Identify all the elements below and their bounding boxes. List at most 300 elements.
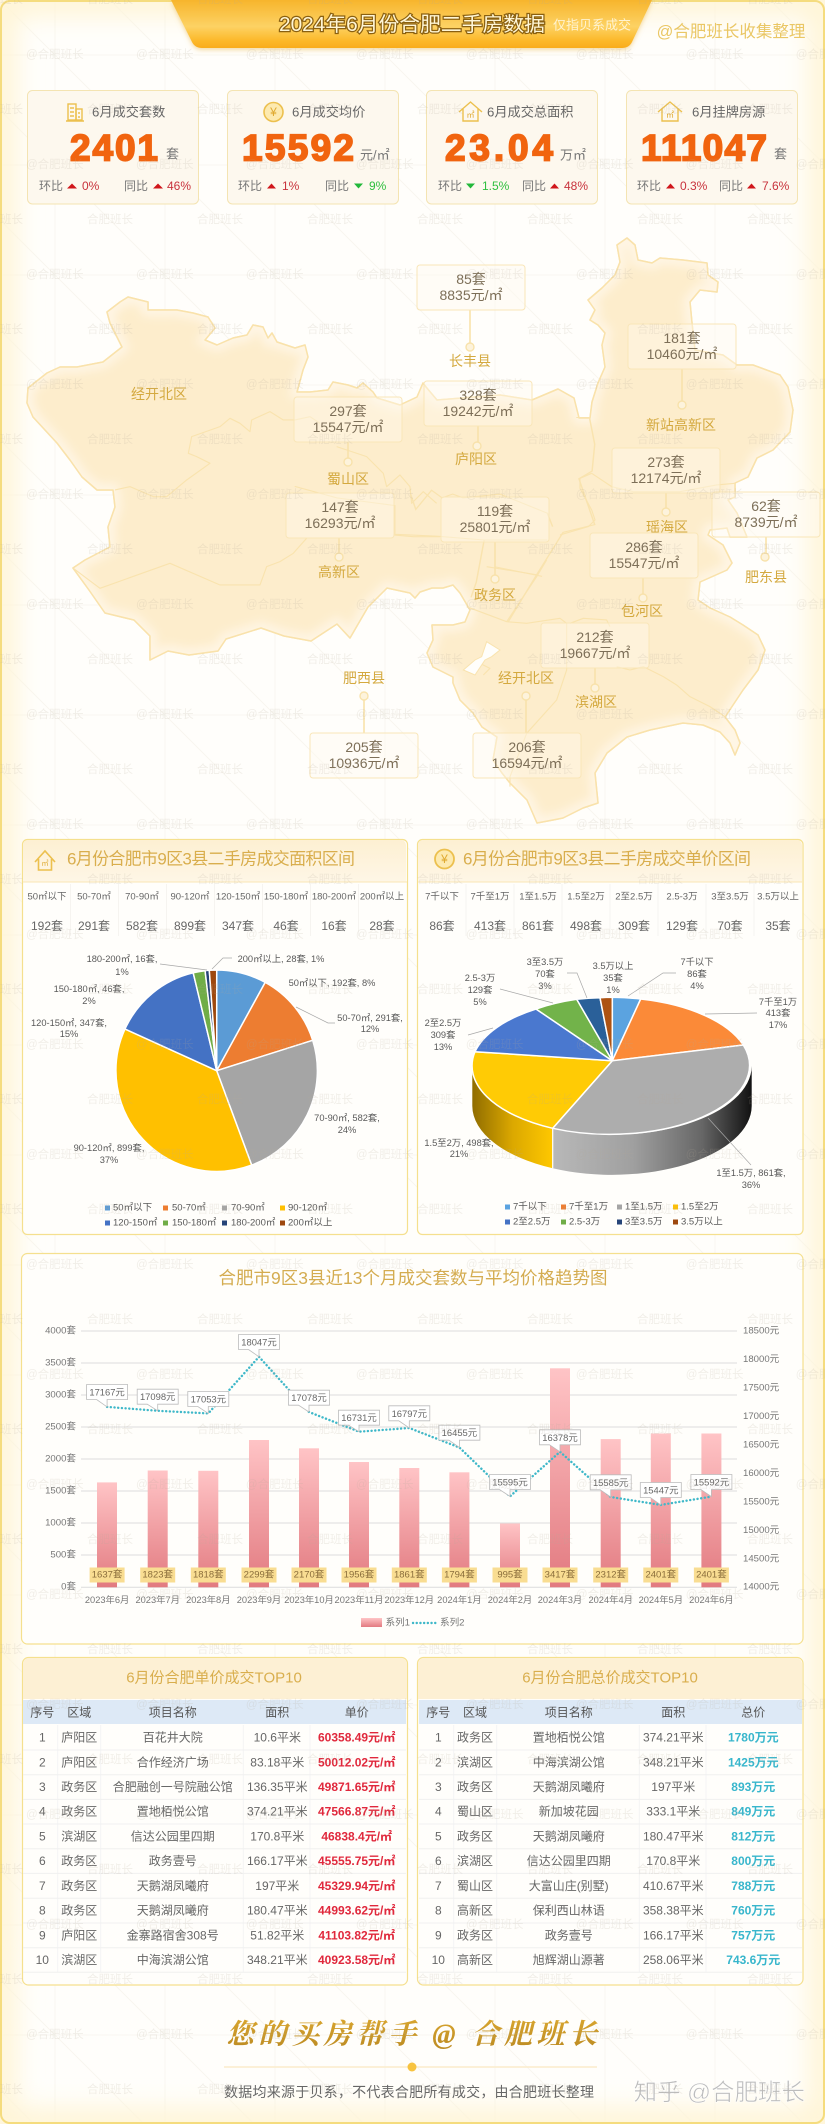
table rows: [23, 1725, 406, 1972]
legend: area: 50-70㎡: [172, 1202, 206, 1214]
table rows: 天鹅湖凤曦府: [137, 1903, 209, 1918]
pie labels: area: 90-120㎡, 899套,: [74, 1142, 144, 1153]
change row: [438, 179, 588, 193]
table rows: 258.06平米: [643, 1953, 704, 1967]
right axis: [743, 1326, 780, 1592]
legend: area: 90-120㎡: [288, 1202, 328, 1214]
change row: 7.6%: [762, 179, 790, 193]
KPI card: average price: 元/㎡: [360, 148, 390, 162]
table rows: 新加坡花园: [539, 1804, 599, 1819]
legend: area: 120-150㎡: [113, 1218, 158, 1228]
table rows: 7: [435, 1879, 442, 1893]
data label: 经开区: [473, 733, 581, 778]
change row: 0%: [82, 179, 100, 193]
bar value labels: 2299套: [244, 1568, 275, 1580]
table rows: 348.21平米: [247, 1953, 308, 1967]
table rows: 358.38平米: [643, 1904, 704, 1918]
price table: [425, 884, 799, 936]
icon: house listing: ㎡: [666, 110, 674, 120]
table rows: 庐阳区: [61, 1927, 97, 1942]
district borders: [73, 412, 735, 787]
pie labels: area: 200㎡以上, 28套, 1%: [238, 953, 324, 964]
month labels: 2024年4月: [588, 1594, 633, 1605]
bar value labels: 1818套: [193, 1568, 224, 1580]
district names: 滨湖区: [575, 694, 617, 710]
area table: [27, 884, 405, 936]
table rows: 置地栢悦公馆: [137, 1804, 209, 1819]
table rows: 348.21平米: [643, 1755, 704, 1769]
3D pie labels: [424, 957, 797, 1190]
KPI card: transactions: 6月成交套数: [92, 104, 165, 120]
price line: [107, 1357, 711, 1505]
heading: 6月份合肥单价成交TOP10: [126, 1668, 302, 1686]
data label: 经开区: 206套: [508, 739, 546, 755]
district names: 经开北区: [131, 386, 187, 402]
pie labels: area: 2%: [82, 996, 96, 1006]
data label: 肥西县: [310, 733, 418, 778]
table rows: 374.21平米: [247, 1805, 308, 1819]
price callouts: 15447元: [643, 1484, 679, 1496]
area table: 90-120㎡: [170, 892, 210, 902]
table rows: 10: [36, 1953, 49, 1967]
change row: 46%: [167, 179, 191, 193]
table rows: 政务区: [61, 1804, 97, 1819]
pie labels: area: 12%: [361, 1024, 379, 1034]
area table: 50㎡以下: [27, 892, 67, 902]
table header: 单价: [345, 1706, 369, 1720]
KPI card: transactions: [28, 90, 198, 204]
table rows: 政务壹号: [545, 1927, 593, 1942]
table rows: 893万元: [731, 1780, 775, 1794]
table rows: 166.17平米: [643, 1928, 704, 1942]
right axis: 18500元: [743, 1326, 780, 1336]
table rows: 812万元: [731, 1829, 775, 1843]
table rows: 51.82平米: [250, 1928, 304, 1942]
3D pie labels: 21%: [450, 1149, 468, 1159]
table rows: 788万元: [731, 1879, 775, 1893]
table header: 序号: [30, 1705, 54, 1720]
data label: 瑶海区: 273套: [647, 454, 685, 470]
data label: 肥东县: 8739元/㎡: [734, 514, 798, 530]
price table: 1.5至2万: [567, 892, 605, 902]
table rows: 金寨路宿舍308号: [127, 1927, 219, 1942]
KPI card: total area: 万㎡: [560, 148, 586, 162]
table header: 总价: [741, 1706, 765, 1720]
table rows: 849万元: [731, 1805, 775, 1819]
table rows: 41103.82元/㎡: [318, 1927, 395, 1942]
area table: 46套: [273, 919, 299, 933]
table header: 序号: [426, 1705, 450, 1720]
district names: 政务区: [474, 587, 516, 603]
data label: 经开区: 16594元/㎡: [492, 755, 562, 771]
table rows: 天鹅湖凤曦府: [137, 1878, 209, 1893]
panel: top 10 by unit price: [22, 1658, 408, 1985]
price table: 498套: [570, 919, 602, 933]
panel heading: ㎡: [42, 860, 48, 868]
price table: 3.5万以上: [757, 892, 799, 902]
table rows: 4: [435, 1805, 442, 1819]
data label: 新站高新区: 10460元/㎡: [647, 346, 717, 362]
price callouts: [87, 1334, 732, 1505]
data label: 肥东县: 62套: [751, 498, 781, 514]
district names: 肥东县: [745, 569, 787, 585]
table rows: 政务区: [61, 1779, 97, 1794]
table rows: 6: [39, 1854, 46, 1868]
icon: house area: [459, 102, 482, 121]
table rows: 743.6万元: [726, 1953, 780, 1967]
pie labels: area: 50-70㎡, 291套,: [337, 1012, 403, 1023]
bar value labels: [90, 1568, 729, 1582]
data label: 高新区: [286, 493, 394, 538]
bar value labels: 3417套: [545, 1568, 576, 1580]
table rows: 3: [39, 1780, 46, 1794]
change row: 0.3%: [680, 179, 708, 193]
subtitle note: 仅指贝系成交: [553, 18, 631, 32]
table rows: 政务区: [457, 1927, 493, 1942]
value: 2401: [70, 128, 158, 168]
table rows: 天鹅湖凤曦府: [533, 1828, 605, 1843]
value: 23.04: [445, 128, 553, 168]
bar value labels: 1637套: [92, 1568, 123, 1580]
table header: 面积: [661, 1706, 685, 1720]
table rows: 政务壹号: [149, 1853, 197, 1868]
KPI card: listings: 套: [774, 146, 787, 162]
table rows: 10: [432, 1953, 445, 1967]
table rows: 滨湖区: [61, 1828, 97, 1843]
table rows: 180.47平米: [247, 1904, 308, 1918]
table rows: 3: [435, 1780, 442, 1794]
table rows: 政务区: [61, 1853, 97, 1868]
3D pie labels: 4%: [690, 981, 704, 991]
month labels: 2024年6月: [689, 1594, 734, 1605]
table rows: 1425万元: [728, 1755, 779, 1769]
table rows: 83.18平米: [250, 1755, 304, 1769]
3D pie labels: 13%: [434, 1042, 452, 1052]
table rows: 政务区: [457, 1730, 493, 1745]
left axis: 0套: [61, 1580, 76, 1592]
left axis: 2500套: [45, 1420, 76, 1432]
chart legend: 系列2: [440, 1616, 465, 1628]
month labels: 2023年12月: [384, 1594, 434, 1605]
3D pie labels: 17%: [769, 1020, 787, 1030]
pie labels: area: 150-180㎡, 46套,: [54, 983, 124, 994]
pie labels: area: 120-150㎡, 347套,: [31, 1017, 107, 1028]
table rows: 5: [39, 1829, 46, 1843]
table rows: 4: [39, 1805, 46, 1819]
data label: 庐阳区: 328套: [459, 387, 497, 403]
price table: 3至3.5万: [711, 892, 749, 902]
table rows: 置地栢悦公馆: [533, 1730, 605, 1745]
data label: 滨湖区: 212套: [576, 629, 614, 645]
change row: [39, 179, 191, 193]
data label: 长丰县: 85套: [456, 271, 486, 287]
legend: price: 7千至1万: [569, 1202, 608, 1212]
change row: [637, 179, 790, 193]
right axis: 15500元: [743, 1496, 780, 1508]
table rows: 9: [435, 1928, 442, 1942]
table rows: 136.35平米: [247, 1780, 308, 1794]
credit line: @合肥班长收集整理: [657, 22, 805, 41]
data label: 瑶海区: 12174元/㎡: [631, 470, 701, 486]
title banner: [171, 0, 652, 48]
table rows: 保利西山林语: [533, 1904, 605, 1918]
data label: 庐阳区: 19242元/㎡: [443, 403, 513, 419]
pie labels: area: 180-200㎡, 16套,: [87, 953, 157, 964]
data label: 政务区: 25801元/㎡: [460, 519, 530, 535]
legend: price: [505, 1202, 723, 1228]
table header: 面积: [265, 1706, 289, 1720]
table rows: 蜀山区: [457, 1879, 493, 1893]
table header: [23, 1700, 406, 1724]
footer note: 数据均来源于贝系，不代表合肥所有成交，由合肥班长整理: [224, 2084, 594, 2100]
main title: 2024年6月份合肥二手房数据: [279, 13, 545, 36]
table rows: 180.47平米: [643, 1829, 704, 1843]
legend: price: 3.5万以上: [681, 1216, 723, 1228]
legend: price: 2.5-3万: [569, 1216, 600, 1228]
table header: 项目名称: [545, 1705, 593, 1720]
bar value labels: 2312套: [595, 1568, 627, 1580]
table rows: 10.6平米: [254, 1731, 301, 1745]
month labels: 2024年5月: [639, 1594, 683, 1605]
legend: area: 50㎡以下: [113, 1202, 152, 1214]
price callouts: 17167元: [89, 1386, 125, 1398]
month labels: 2023年11月: [335, 1594, 383, 1605]
data label: 政务区: [441, 497, 549, 542]
table rows: 8: [435, 1904, 442, 1918]
table rows: 44993.62元/㎡: [318, 1903, 395, 1918]
3D pie labels: 5%: [473, 997, 487, 1007]
table rows: 政务区: [457, 1779, 493, 1794]
month labels: 2023年9月: [237, 1594, 281, 1605]
change row: 同比: [719, 179, 743, 193]
area table: 16套: [321, 919, 347, 933]
3D pie labels: 35套: [603, 972, 623, 983]
change row: 9%: [369, 179, 387, 193]
area table: 150-180㎡: [264, 892, 309, 902]
data label: 高新区: 147套: [321, 499, 359, 515]
legend: area: 150-180㎡: [172, 1218, 217, 1228]
table rows: 7: [39, 1879, 46, 1893]
bar value labels: 995套: [497, 1568, 523, 1580]
panel heading: ¥: [440, 852, 448, 866]
change row: 1.5%: [482, 179, 510, 193]
right axis: 16500元: [743, 1440, 780, 1450]
price table: 70套: [717, 919, 743, 933]
3D pie labels: 86套: [687, 968, 707, 979]
footer slogan: 您的买房帮手 @ 合肥班长: [226, 2018, 600, 2050]
pie labels: area: 1%: [115, 967, 129, 977]
price table: 35套: [765, 919, 791, 933]
table rows: 合作经济广场: [137, 1754, 209, 1769]
price table: 413套: [474, 919, 506, 933]
3D pie labels: 7千以下: [680, 957, 714, 967]
left axis: 3000套: [45, 1388, 76, 1400]
table header: [419, 1700, 802, 1724]
icon: house area: ㎡: [466, 110, 474, 120]
icon: yen coin: ¥: [269, 105, 277, 119]
table rows: 757万元: [731, 1928, 775, 1942]
table rows: 庐阳区: [61, 1730, 97, 1745]
3D pie labels: 1至1.5万, 861套,: [716, 1167, 786, 1178]
3D pie labels: 1.5至2万, 498套,: [424, 1137, 494, 1148]
data label: 蜀山区: 15547元/㎡: [313, 419, 383, 435]
table rows: 庐阳区: [61, 1754, 97, 1769]
data label: 滨湖区: [541, 623, 649, 668]
district names: 蜀山区: [327, 471, 369, 487]
area table: 192套: [31, 919, 63, 933]
table header: 区域: [463, 1706, 487, 1720]
icon: yen coin: [264, 102, 283, 122]
panel: top 10 by total price: [418, 1658, 803, 1985]
table rows: 大富山庄(别墅): [529, 1878, 609, 1893]
data label: 长丰县: 8835元/㎡: [439, 287, 503, 303]
area table: 120-150㎡: [216, 892, 261, 902]
pie labels: area: 24%: [338, 1125, 356, 1135]
month labels: 2023年8月: [186, 1594, 231, 1605]
right axis: 14500元: [743, 1554, 780, 1564]
right axis: 17000元: [743, 1411, 780, 1422]
connectors and dots: [335, 310, 769, 733]
table rows: 5: [435, 1829, 442, 1843]
bars: [97, 1368, 721, 1587]
right axis: 15000元: [743, 1525, 780, 1536]
data label: 高新区: 16293元/㎡: [305, 515, 375, 531]
district names: 肥西县: [343, 670, 385, 686]
legend: price: 7千以下: [513, 1202, 547, 1212]
price table: 2.5-3万: [666, 892, 698, 902]
table rows: 50012.02元/㎡: [318, 1754, 395, 1769]
3D pie labels: 413套: [766, 1007, 790, 1018]
data label: 肥西县: 205套: [345, 739, 383, 755]
3D pie labels: 7千至1万: [759, 997, 797, 1007]
pie labels: area: 70-90㎡, 582套,: [314, 1112, 380, 1123]
data label: 蜀山区: 297套: [329, 403, 367, 419]
bar value labels: 2401套: [645, 1568, 677, 1580]
table header: 项目名称: [149, 1705, 197, 1720]
price callouts: 17098元: [140, 1391, 175, 1402]
area table: 50-70㎡: [77, 892, 111, 902]
panel heading: 6月份合肥市9区3县二手房成交面积区间: [67, 850, 355, 868]
table rows: 374.21平米: [643, 1731, 704, 1745]
legend: area: 180-200㎡: [231, 1218, 276, 1228]
KPI card: listings: 6月挂牌房源: [692, 104, 765, 120]
pie labels: area: 15%: [60, 1029, 78, 1039]
panel: price distribution: [418, 840, 803, 1234]
month labels: 2023年7月: [135, 1594, 180, 1605]
left axis: 4000套: [45, 1324, 76, 1336]
district names: 经开北区: [498, 670, 554, 686]
table rows: 197平米: [255, 1879, 299, 1893]
left axis: 500套: [50, 1548, 76, 1560]
3D pie labels: 129套: [468, 984, 492, 995]
3D pie labels: 2至2.5万: [425, 1018, 461, 1028]
KPI card: total area: [426, 90, 598, 204]
3D pie labels: 2.5-3万: [465, 973, 495, 983]
data label: 庐阳区: [424, 381, 532, 426]
table rows: 政务区: [61, 1878, 97, 1893]
right axis: 17500元: [743, 1382, 780, 1394]
district names: 长丰县: [449, 353, 491, 369]
KPI card: average price: [228, 90, 398, 204]
table rows: 2: [39, 1755, 46, 1769]
table rows: 百花井大院: [143, 1730, 203, 1745]
area table: 200㎡以上: [360, 892, 405, 902]
month labels: 2024年2月: [488, 1594, 532, 1605]
data label: 包河区: [590, 533, 698, 578]
table rows: 政务区: [457, 1828, 493, 1843]
price callouts: 17078元: [291, 1392, 327, 1403]
table rows: 旭辉湖山源著: [533, 1952, 605, 1967]
table rows: 1: [435, 1731, 442, 1745]
left axis: [45, 1324, 76, 1592]
left axis: 1000套: [45, 1516, 76, 1528]
legend: area: 70-90㎡: [231, 1202, 265, 1214]
table rows: 60358.49元/㎡: [318, 1730, 395, 1745]
data label: 长丰县: [417, 265, 525, 310]
data label: 蜀山区: [294, 397, 402, 442]
3D pie labels: 3%: [538, 981, 552, 991]
month labels: 2023年10月: [284, 1594, 334, 1605]
district names: [131, 353, 787, 710]
legend: price: 2至2.5万: [513, 1216, 550, 1228]
price callouts: 15592元: [694, 1476, 729, 1488]
change row: 同比: [522, 179, 546, 193]
table rows: 166.17平米: [247, 1854, 308, 1868]
change row: 同比: [124, 179, 148, 193]
3D pie labels: 309套: [431, 1029, 455, 1040]
area table: 347套: [222, 919, 254, 933]
data label: 滨湖区: 19667元/㎡: [560, 645, 630, 661]
area table: 899套: [174, 919, 206, 933]
right axis: 16000元: [743, 1468, 780, 1479]
table rows: 9: [39, 1928, 46, 1942]
month labels: 2024年3月: [538, 1594, 582, 1605]
panel heading: 6月份合肥市9区3县二手房成交单价区间: [463, 850, 751, 868]
price table: 1至1.5万: [519, 892, 557, 902]
legend: price: 3至3.5万: [625, 1216, 662, 1228]
KPI card: transactions: 套: [166, 146, 179, 162]
table rows: 333.1平米: [646, 1805, 700, 1819]
zhihu watermark: 知乎 @合肥班长: [634, 2079, 805, 2105]
price callouts: 17053元: [191, 1394, 226, 1404]
3D pie labels: 70套: [535, 968, 555, 979]
area table: 582套: [126, 919, 158, 933]
data label: 政务区: 119套: [477, 503, 513, 519]
panel: area distribution: [22, 840, 408, 1234]
table rows: 410.67平米: [643, 1879, 704, 1893]
data label: 肥东县: [712, 492, 820, 537]
month labels: 2023年6月: [85, 1594, 129, 1605]
3D pie chart: price: [472, 997, 752, 1175]
3D pie labels: 3.5万以上: [593, 961, 633, 971]
legend: price: 1.5至2万: [681, 1202, 718, 1212]
price table: 7千至1万: [470, 892, 510, 902]
table rows: 高新区: [457, 1952, 493, 1967]
table header: 区域: [67, 1706, 91, 1720]
left axis: 1500套: [45, 1484, 76, 1496]
icon: building: [66, 104, 84, 121]
district names: 高新区: [318, 564, 360, 580]
area table: 70-90㎡: [125, 892, 159, 902]
data label: 新站高新区: 181套: [663, 330, 701, 346]
table rows: 2: [435, 1755, 442, 1769]
map silhouette: [27, 238, 793, 823]
KPI card: average price: 6月成交均价: [292, 104, 365, 120]
table rows: 40923.58元/㎡: [318, 1952, 395, 1967]
table rows: [419, 1725, 802, 1972]
table rows: 8: [39, 1904, 46, 1918]
pie labels: area: [31, 953, 403, 1165]
